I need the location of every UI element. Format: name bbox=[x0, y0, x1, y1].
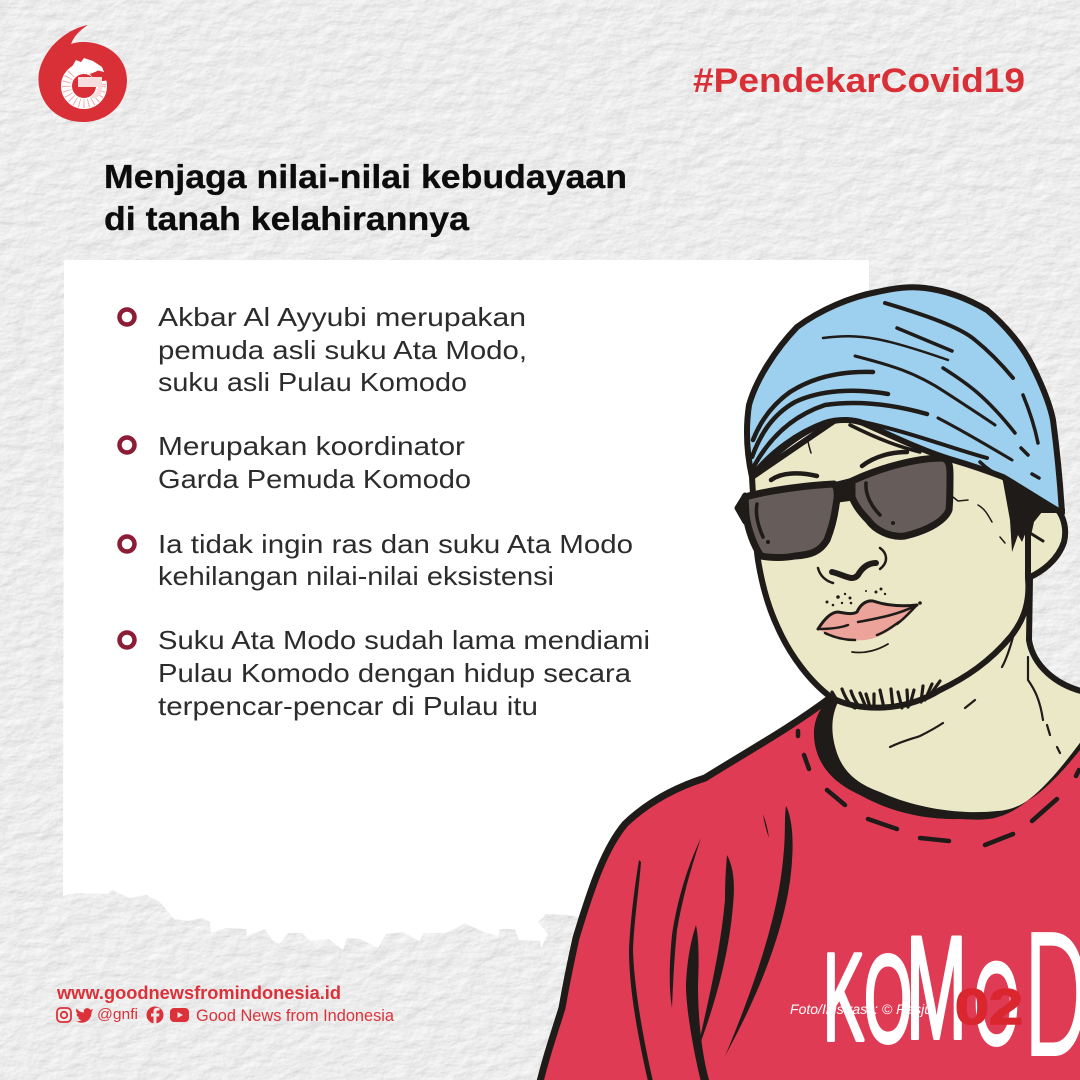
bullet 1: suku asli Pulau Komodo bbox=[158, 367, 467, 397]
title: di tanah kelahirannya bbox=[104, 200, 470, 237]
panel: white torn paper card bbox=[63, 260, 869, 950]
face wrinkles and eyebrows bbox=[771, 437, 1005, 543]
bullet 1 bbox=[120, 302, 527, 397]
website: www.goodnewsfromindonesia.id bbox=[56, 982, 341, 1003]
ear bbox=[1028, 510, 1065, 578]
neck outline right bbox=[1029, 578, 1080, 692]
freckles bbox=[826, 588, 886, 606]
red t-shirt bbox=[538, 640, 1080, 1080]
sunglasses bbox=[737, 458, 950, 558]
bullet 4 bbox=[120, 625, 650, 721]
shirt lettering: KO bbox=[823, 927, 912, 1069]
page number: 02 bbox=[955, 979, 1023, 1035]
bullet list bbox=[120, 302, 650, 721]
bullet 4: terpencar-pencar di Pulau itu bbox=[158, 691, 538, 721]
bullet 2 bbox=[120, 431, 471, 494]
hair bbox=[1002, 476, 1053, 568]
bullet 1: pemuda asli suku Ata Modo, bbox=[158, 335, 527, 365]
bullet 2: Garda Pemuda Komodo bbox=[158, 464, 471, 494]
channel name: Good News from Indonesia bbox=[196, 1006, 395, 1025]
blue headband bbox=[747, 287, 1062, 513]
collar bbox=[814, 697, 1080, 820]
logo: white G ring with eagle bbox=[66, 58, 110, 104]
illustration: man with blue headband and sunglasses bbox=[538, 287, 1080, 1080]
bullet 3: kehilangan nilai-nilai eksistensi bbox=[158, 561, 554, 591]
logo bbox=[38, 25, 127, 122]
headband folds bbox=[752, 303, 1039, 478]
lips bbox=[818, 601, 922, 653]
footer bbox=[56, 982, 395, 1025]
shirt lettering: O bbox=[974, 940, 1019, 1069]
bullet 1: Akbar Al Ayyubi merupakan bbox=[158, 302, 526, 332]
hashtag: #PendekarCovid19 bbox=[693, 62, 1025, 100]
icon: twitter bbox=[76, 1008, 93, 1023]
shirt lettering: M bbox=[906, 908, 967, 1070]
neck lines bbox=[890, 637, 1060, 753]
shirt collar stitches bbox=[798, 731, 1079, 845]
beard bbox=[832, 681, 940, 708]
bullet 3: Ia tidak ingin ras dan suku Ata Modo bbox=[158, 529, 633, 559]
title: Menjaga nilai-nilai kebudayaan bbox=[104, 158, 627, 195]
bullet 4: Suku Ata Modo sudah lama mendiami bbox=[158, 625, 650, 655]
icon: youtube bbox=[170, 1008, 189, 1022]
title bbox=[104, 158, 627, 237]
logo: red swirl bbox=[38, 25, 127, 122]
bullet 3 bbox=[120, 529, 633, 591]
icon: facebook bbox=[146, 1006, 164, 1024]
nose bbox=[818, 548, 886, 583]
face bbox=[752, 410, 1062, 708]
ear detail bbox=[1028, 520, 1043, 578]
handle: @gnfi bbox=[97, 1006, 138, 1023]
shirt folds bbox=[629, 806, 793, 1080]
neck bbox=[827, 575, 1080, 816]
bullet 4: Pulau Komodo dengan hidup secara bbox=[158, 658, 632, 688]
icon: instagram bbox=[57, 1008, 71, 1022]
photo credit: Foto/Ilustrasi : © Rasju bbox=[790, 1002, 933, 1017]
bullet 2: Merupakan koordinator bbox=[158, 431, 465, 461]
